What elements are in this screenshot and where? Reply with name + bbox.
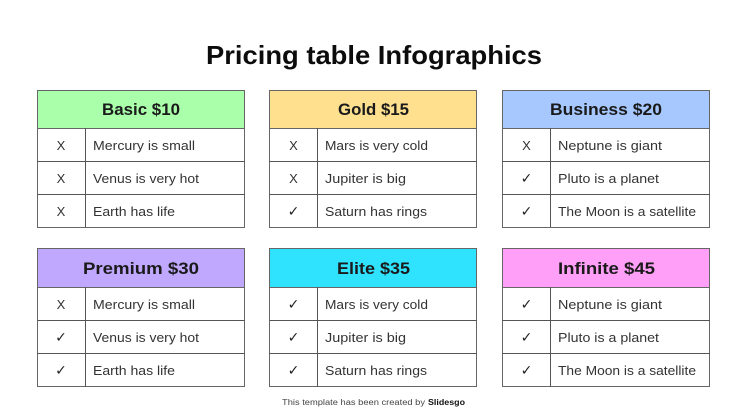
header: Elite $35 [270, 248, 476, 288]
panel: Gold plan [269, 90, 477, 228]
row: Moon: The Moon is a satellite [558, 363, 696, 378]
header: Gold $15 [270, 90, 476, 128]
row: Jupiter: Jupiter is big [325, 330, 406, 345]
row: Moon: ✓ [521, 204, 532, 220]
row: Saturn: Saturn has rings [325, 204, 428, 219]
row: Pluto [521, 330, 659, 346]
row: Mars: ✓ [288, 297, 299, 313]
row: Jupiter: Jupiter is big [325, 171, 406, 186]
header: Basic $10 [38, 90, 244, 128]
row: Neptune: X [522, 138, 531, 153]
row: Moon [521, 204, 696, 220]
panel: Basic plan [37, 90, 245, 228]
row: Earth: X [57, 204, 66, 219]
panel: Elite plan [269, 248, 477, 387]
row: Pluto: ✓ [521, 171, 532, 187]
footer credit: This template has been created by [282, 398, 425, 407]
row: Venus: Venus is very hot [93, 171, 199, 186]
header: Infinite $45 [502, 248, 710, 288]
row: Mars: Mars is very cold [325, 297, 428, 312]
row: Venus [55, 330, 199, 346]
row: Earth: ✓ [55, 363, 67, 379]
footer credit: Slidesgo [428, 398, 465, 407]
row: Neptune: Neptune is giant [558, 138, 662, 153]
header: Business $20: Business $20 [550, 100, 662, 119]
row: Mercury: X [57, 297, 66, 312]
row: Saturn [288, 204, 428, 220]
row: Pluto: Pluto is a planet [558, 171, 659, 186]
row: Mars [288, 297, 428, 313]
row: Mercury: X [57, 138, 66, 153]
panel: Infinite plan [502, 248, 710, 387]
row: Earth: Earth has life [93, 363, 175, 378]
row: Jupiter [289, 171, 406, 186]
panel: Business plan [502, 90, 710, 228]
row: Mars: X [289, 138, 298, 153]
header: Gold $15: Gold $15 [338, 100, 409, 119]
row: Earth [55, 363, 175, 379]
header: Premium $30 [38, 248, 244, 288]
header: Business $20 [502, 90, 710, 128]
row: Neptune: Neptune is giant [558, 297, 662, 312]
row: Venus [57, 171, 199, 186]
panel: Premium plan [37, 248, 245, 387]
row: Earth [57, 204, 175, 219]
row: Pluto: Pluto is a planet [558, 330, 659, 345]
row: Venus: ✓ [55, 330, 67, 346]
title: Pricing table Infographics [206, 40, 542, 70]
row: Pluto [521, 171, 659, 187]
header: Basic $10: Basic $10 [102, 100, 180, 119]
footer credit [282, 398, 465, 407]
row: Saturn: ✓ [288, 204, 299, 220]
row: Pluto: ✓ [521, 330, 532, 346]
row: Neptune: ✓ [521, 297, 532, 313]
row: Saturn: ✓ [288, 363, 299, 379]
row: Mercury [57, 297, 195, 312]
row: Mars: Mars is very cold [325, 138, 428, 153]
row: Jupiter: X [289, 171, 298, 186]
row: Saturn [288, 363, 428, 379]
row: Mercury: Mercury is small [93, 297, 195, 312]
row: Venus: Venus is very hot [93, 330, 199, 345]
row: Neptune [522, 138, 662, 153]
row: Neptune [521, 297, 662, 313]
row: Moon [521, 363, 696, 379]
row: Mercury [57, 138, 195, 153]
row: Jupiter [288, 330, 406, 346]
row: Venus: X [57, 171, 66, 186]
header: Elite $35: Elite $35 [337, 259, 410, 278]
row: Jupiter: ✓ [288, 330, 299, 346]
row: Moon: The Moon is a satellite [558, 204, 696, 219]
row: Mercury: Mercury is small [93, 138, 195, 153]
header: Infinite $45: Infinite $45 [558, 259, 655, 278]
row: Saturn: Saturn has rings [325, 363, 428, 378]
row: Moon: ✓ [521, 363, 532, 379]
header: Premium $30: Premium $30 [83, 259, 199, 278]
row: Earth: Earth has life [93, 204, 175, 219]
